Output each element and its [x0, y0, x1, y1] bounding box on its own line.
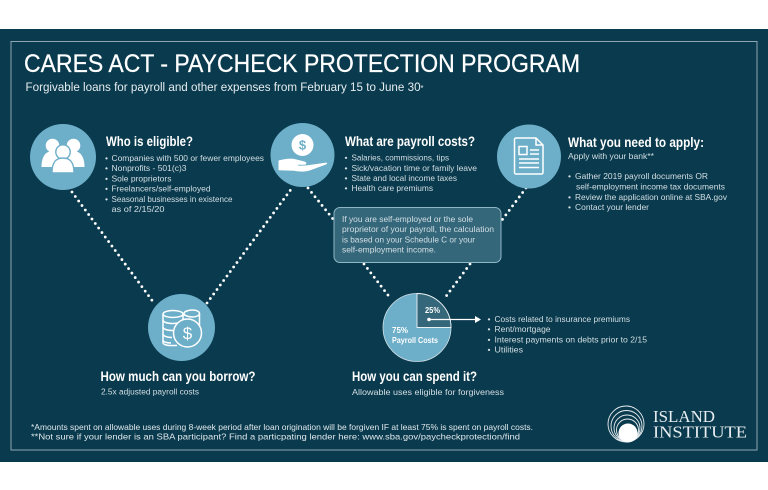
heading: who is eligible: Who is eligible? [106, 134, 193, 149]
other uses list: Costs related to insurance premiums [494, 314, 630, 324]
logo: Island Institute [608, 406, 747, 442]
payroll cost list: Salaries, commissions, tips [352, 152, 449, 162]
application list: Review the application online at SBA.gov [575, 192, 728, 202]
other uses list: Rent/mortgage [494, 324, 551, 334]
application list: self-employment income tax documents [576, 182, 725, 192]
application list: Gather 2019 payroll documents OR [575, 171, 708, 181]
footnotes: *Amounts spent on allowable uses during 8-week period after loan origination will be forgiven IF at least 75% is spent on payroll costs. [31, 422, 533, 432]
eligibility list: Freelancers/self-employed [112, 184, 211, 194]
pie chart: 75% payroll costs, 25% other [383, 294, 451, 362]
icon: coin stacks: $ [183, 324, 193, 343]
panel: how you can spend it [352, 294, 647, 397]
logo: Island Institute: INSTITUTE [653, 422, 747, 442]
other uses list: • [488, 324, 491, 334]
eligibility list: Seasonal businesses in existence [112, 194, 233, 204]
icon: hand with coin: $ [299, 138, 307, 152]
payroll cost list: • [344, 183, 348, 193]
other uses list: • [488, 334, 491, 344]
eligibility list: • [105, 174, 108, 184]
icon: hand with coin [270, 123, 334, 187]
spend detail: Allowable uses eligible for forgiveness [352, 387, 504, 397]
payroll cost list: State and local income taxes [352, 173, 457, 183]
panel: payroll costs [270, 123, 477, 193]
arrow [427, 316, 481, 323]
panel: what you need to apply [497, 124, 728, 212]
callout: self-employed note: proprietor of your payroll, the calculation [342, 224, 494, 234]
footnotes: **Not sure if your lender is an SBA participant? Find a particpating lender here: www.sba.gov/paycheckprotection/find [31, 432, 520, 442]
eligibility list: • [105, 184, 108, 194]
heading: payroll costs: What are payroll costs? [345, 134, 475, 149]
apply with your bank: Apply with your bank** [568, 151, 655, 161]
icon: document [497, 124, 561, 188]
other uses list: Interest payments on debts prior to 2/15 [494, 334, 647, 344]
heading: what you need to apply: What you need to apply: [568, 135, 704, 150]
eligibility list: • [105, 194, 108, 204]
title: CARES ACT - PAYCHECK PROTECTION PROGRAM [24, 50, 580, 78]
application list: • [568, 192, 571, 202]
other uses list [488, 314, 647, 354]
dotted connectors [72, 188, 526, 303]
other uses list: • [488, 314, 491, 324]
pie chart: 75% payroll costs, 25% other: Payroll Costs [392, 335, 438, 345]
pie chart: 75% payroll costs, 25% other: 75% [392, 326, 408, 335]
payroll cost list [344, 152, 477, 193]
icon: coin stacks [148, 294, 215, 361]
callout: self-employed note: is based on your Schedule C or your [342, 234, 475, 244]
eligibility list: • [105, 163, 108, 173]
panel: who is eligible [30, 124, 264, 214]
heading: how much can you borrow: How much can you borrow? [100, 368, 256, 384]
application list: Contact your lender [575, 202, 649, 212]
heading: how you can spend it: How you can spend it? [352, 368, 477, 384]
application list: • [568, 171, 571, 181]
subtitle: Forgivable loans for payroll and other expenses from February 15 to June 30* [26, 80, 424, 94]
other uses list: • [488, 344, 491, 354]
panel: how much can you borrow [100, 294, 256, 396]
application list [568, 171, 728, 212]
callout: self-employed note [334, 208, 501, 262]
eligibility list: Nonprofits - 501(c)3 [112, 163, 187, 173]
eligibility list [105, 153, 264, 214]
payroll cost list: • [344, 152, 348, 162]
footnotes [31, 422, 533, 442]
payroll cost list: Sick/vacation time or family leave [352, 163, 477, 173]
pie chart: 75% payroll costs, 25% other: 25% [425, 306, 440, 315]
eligibility list: • [105, 153, 108, 163]
application list: • [568, 202, 571, 212]
eligibility list: Companies with 500 or fewer employees [112, 153, 264, 163]
eligibility list: as of 2/15/20 [112, 204, 165, 214]
borrow detail: 2.5x adjusted payroll costs [101, 386, 199, 396]
logo: Island Institute: ISLAND [653, 407, 715, 426]
payroll cost list: • [344, 163, 348, 173]
payroll cost list: Health care premiums [352, 183, 433, 193]
icon: people [30, 124, 96, 190]
payroll cost list: • [344, 173, 348, 183]
callout: self-employed note: self-employment income. [342, 244, 436, 254]
other uses list: Utilities [494, 344, 523, 354]
eligibility list: Sole proprietors [112, 174, 172, 184]
callout: self-employed note: If you are self-employed or the sole [342, 214, 473, 224]
